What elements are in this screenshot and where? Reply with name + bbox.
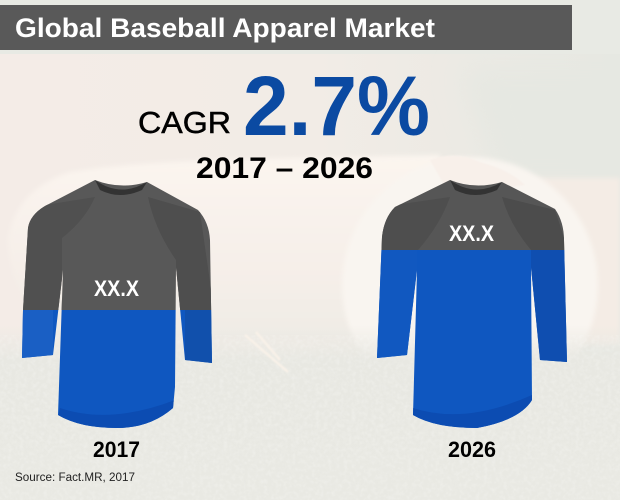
year label 2026: 2026 bbox=[448, 437, 496, 462]
shirt 2017 bbox=[22, 180, 212, 428]
CAGR value: 2.7% bbox=[243, 59, 430, 153]
value 2017: XX.X bbox=[94, 276, 139, 301]
title: Global Baseball Apparel Market bbox=[15, 13, 435, 43]
title bar bbox=[0, 5, 572, 50]
value 2026: XX.X bbox=[449, 221, 494, 246]
source: Source: Fact.MR, 2017 bbox=[15, 472, 135, 484]
period: 2017 – 2026 bbox=[196, 152, 373, 185]
shirt 2026 bbox=[377, 180, 567, 428]
year label 2017: 2017 bbox=[93, 437, 140, 462]
CAGR label: CAGR bbox=[138, 105, 231, 140]
